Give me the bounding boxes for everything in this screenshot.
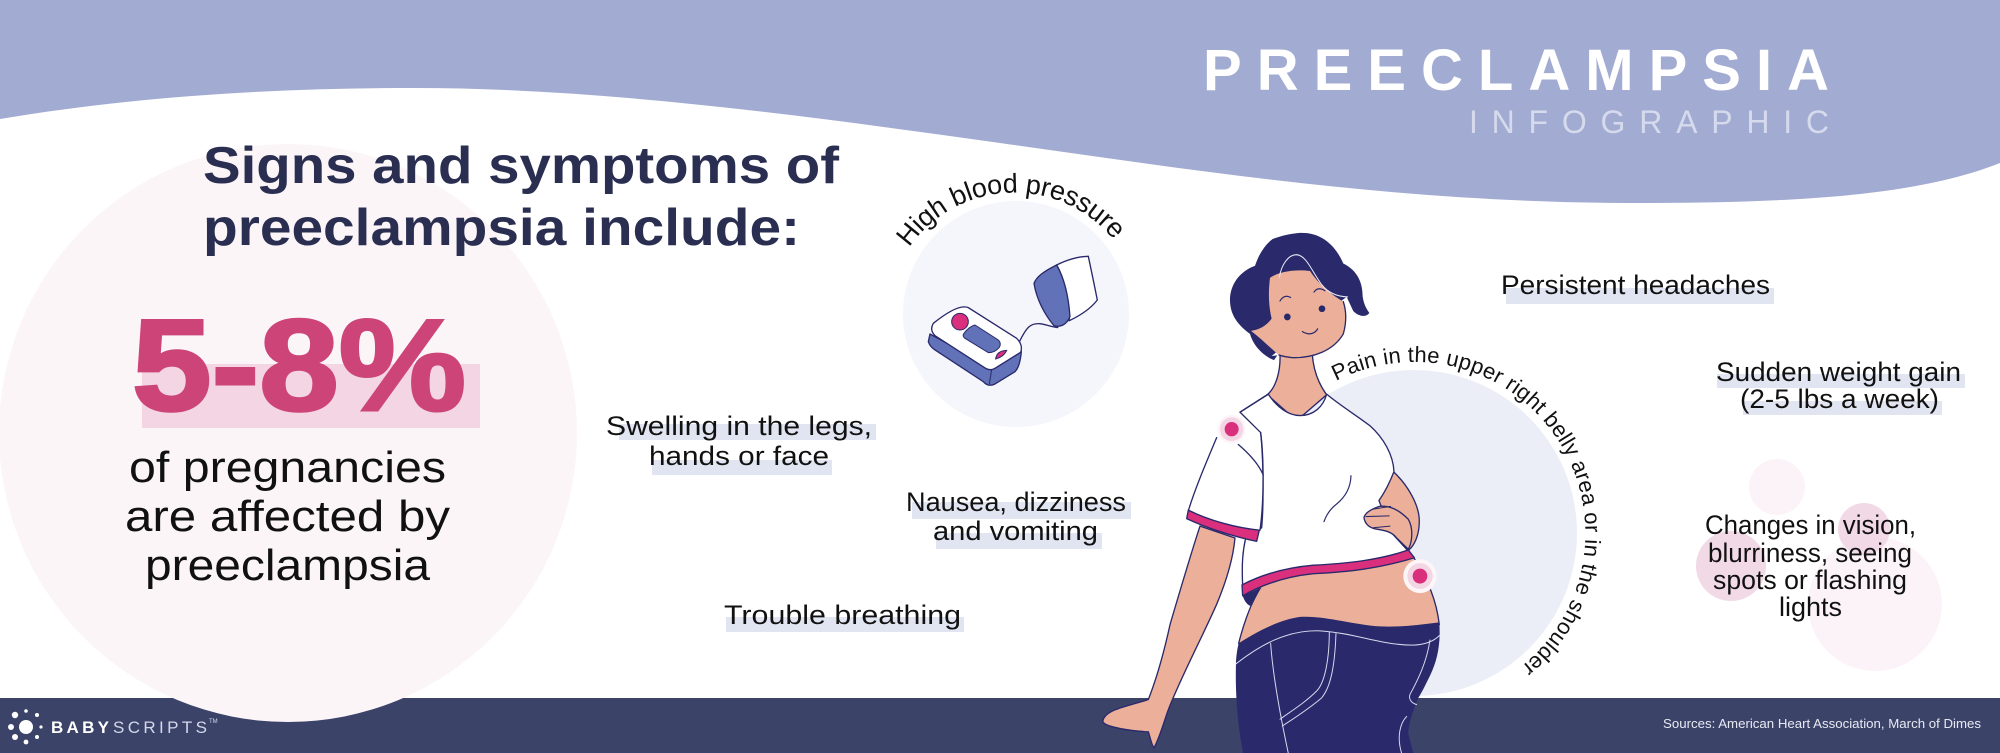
back arm bbox=[1103, 526, 1235, 748]
jeans seams bbox=[1236, 631, 1439, 753]
symptom: swelling: Swelling in the legs, bbox=[606, 411, 872, 441]
symptom: changes in vision: blurriness, seeing bbox=[1708, 538, 1912, 568]
under-shirt shadow bbox=[1243, 587, 1262, 606]
hand bbox=[1364, 506, 1412, 549]
sources note: Sources: American Heart Association, March of Dimes bbox=[1663, 716, 1982, 731]
curved label: pain in the upper right belly: Pain in the upper right belly area or in the shoulder bbox=[1331, 346, 1602, 676]
curved label: high blood pressure: High blood pressure bbox=[896, 172, 1122, 246]
vision spots bbox=[1696, 459, 1942, 671]
shirt torso bbox=[1240, 394, 1413, 586]
header wave band bbox=[0, 0, 2000, 203]
symptom: nausea: Nausea, dizziness bbox=[906, 487, 1126, 517]
logo: Babyscripts: SCRIPTS bbox=[113, 718, 207, 737]
statistic caption: are affected by bbox=[125, 492, 450, 541]
logo: Babyscripts: TM bbox=[209, 719, 218, 725]
hair highlight bbox=[1279, 255, 1348, 297]
icon: blood pressure monitor bbox=[928, 256, 1097, 385]
symptom: nausea bbox=[906, 487, 1131, 549]
symptom: trouble breathing: Trouble breathing bbox=[724, 600, 961, 630]
figure: pregnant woman bbox=[1103, 233, 1440, 753]
symptom: sudden weight gain: Sudden weight gain bbox=[1716, 357, 1961, 387]
heading: Signs and symptoms of bbox=[203, 137, 840, 195]
symptom: sudden weight gain: (2-5 lbs a week) bbox=[1740, 384, 1939, 414]
symptom: changes in vision: Changes in vision, bbox=[1705, 510, 1916, 540]
forearm on hip bbox=[1378, 472, 1419, 551]
belly bbox=[1238, 557, 1439, 645]
sleeve bbox=[1187, 414, 1263, 541]
footer bar bbox=[0, 698, 2000, 753]
symptom: changes in vision bbox=[1705, 510, 1916, 622]
pain dot: shoulder bbox=[1218, 415, 1246, 443]
pink statistic circle bbox=[0, 144, 577, 722]
statistic caption: preeclampsia bbox=[145, 541, 431, 590]
title: PREECLAMPSIA bbox=[1203, 38, 1829, 103]
symptom: swelling bbox=[606, 411, 876, 475]
symptom: sudden weight gain bbox=[1716, 357, 1965, 415]
neck bbox=[1267, 354, 1327, 421]
jeans bbox=[1236, 617, 1440, 753]
jaw line bbox=[1279, 302, 1346, 358]
symptom: changes in vision: lights bbox=[1779, 592, 1842, 622]
logo: Babyscripts bbox=[8, 709, 218, 744]
symptom: changes in vision: spots or flashing bbox=[1713, 565, 1907, 595]
statistic caption: of pregnancies bbox=[129, 443, 446, 492]
blood pressure circle bbox=[903, 201, 1129, 427]
facial features bbox=[1280, 289, 1325, 334]
logo: Babyscripts: BABY bbox=[51, 718, 110, 737]
symptom: swelling: hands or face bbox=[649, 441, 829, 471]
pain dot: belly bbox=[1403, 559, 1437, 593]
title bbox=[1203, 38, 1829, 140]
statistic caption bbox=[125, 443, 450, 590]
symptom: persistent headaches: Persistent headaches bbox=[1501, 270, 1770, 300]
hair bbox=[1230, 233, 1369, 360]
title: INFOGRAPHIC bbox=[1469, 104, 1829, 140]
heading: preeclampsia include: bbox=[203, 199, 800, 257]
sleeve hem bbox=[1187, 510, 1259, 541]
lavender circle behind figure bbox=[1251, 370, 1577, 696]
shirt hem bbox=[1242, 550, 1414, 596]
heading bbox=[203, 137, 840, 257]
face bbox=[1251, 270, 1346, 358]
symptom: nausea: and vomiting bbox=[933, 516, 1098, 546]
statistic: 5-8%: 5-8% bbox=[132, 292, 466, 438]
shirt fold bbox=[1324, 476, 1351, 522]
